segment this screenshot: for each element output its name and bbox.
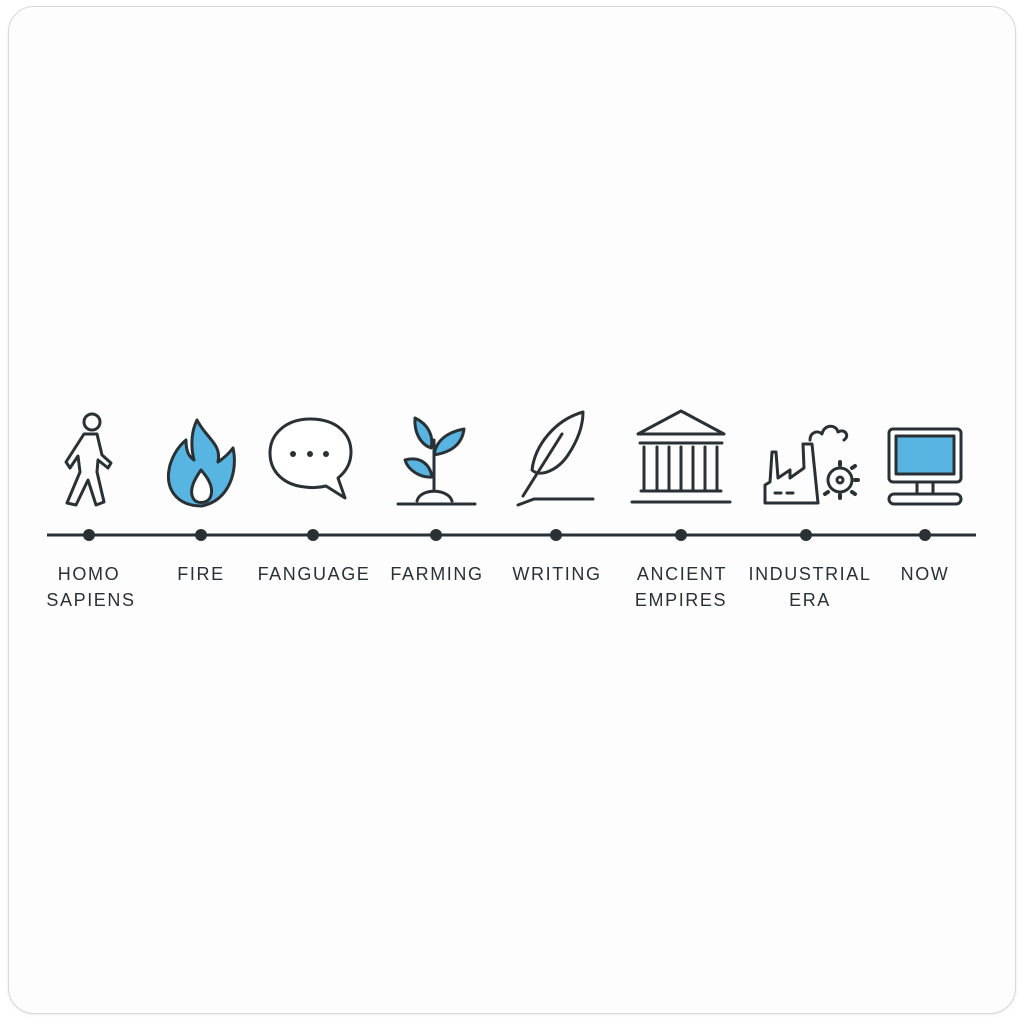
labels: WRITING: [512, 564, 602, 584]
labels: FANGUAGE: [258, 564, 370, 584]
labels: EMPIRES: [635, 590, 727, 610]
labels: SAPIENS: [46, 590, 136, 610]
labels: [46, 564, 949, 610]
labels: NOW: [901, 564, 949, 584]
icon: walking person: [66, 414, 111, 505]
icon: factory with gear: [765, 426, 858, 503]
icon: quill: [518, 412, 593, 505]
icon: temple: [632, 411, 730, 502]
timeline: [47, 529, 976, 541]
labels: FIRE: [177, 564, 225, 584]
labels: HOMO: [58, 564, 120, 584]
icon: sprout: [398, 418, 475, 504]
icon: computer: [889, 429, 961, 504]
labels: ANCIENT: [637, 564, 727, 584]
icon: speech bubble: [270, 419, 351, 498]
labels: ERA: [789, 590, 831, 610]
icon: fire: [168, 420, 234, 506]
labels: INDUSTRIAL: [748, 564, 872, 584]
labels: FARMING: [390, 564, 484, 584]
